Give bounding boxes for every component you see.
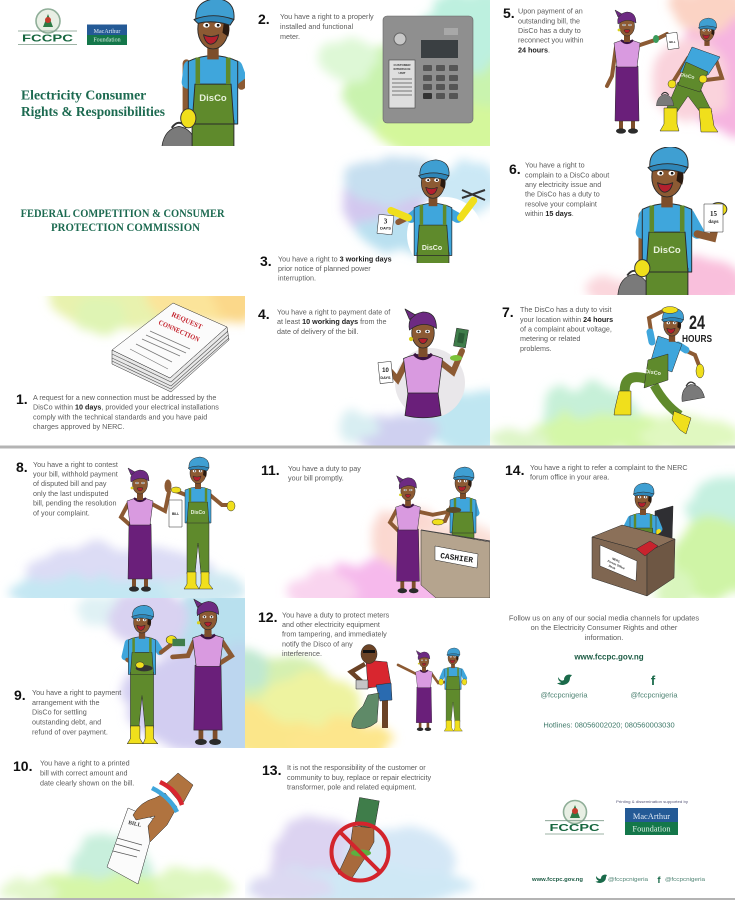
text: 3 working days: [340, 254, 392, 264]
number: 1.: [16, 391, 28, 407]
illustration: DisCo worker: DisCo: [199, 93, 227, 104]
label: 24 hours: [682, 313, 712, 345]
notice: 15 days: 15: [710, 210, 718, 218]
text: community to buy, replace or repair electricity: [287, 773, 431, 782]
watercolor background: [0, 834, 230, 900]
text: DisCo within: [33, 402, 75, 412]
text: arrangement with the: [32, 698, 100, 707]
follow us text: Follow us on any of our social media channels for updates: [509, 614, 699, 622]
number: 11.: [261, 462, 280, 478]
number: 3.: [260, 253, 272, 269]
illustration: running worker: [614, 307, 705, 434]
text: You have a right to a properly: [280, 12, 374, 21]
number: 8.: [16, 459, 28, 475]
panel 9: payment arrangement: [14, 598, 245, 748]
text: and other electricity equipment: [282, 620, 380, 629]
text: interference.: [282, 649, 322, 658]
text: You have a right to payment: [32, 688, 121, 697]
text: comply with the technical standards and you have paid: [33, 412, 207, 422]
text: DisCo for settling: [32, 708, 87, 716]
watercolor background: [314, 0, 490, 146]
panel 12: protect meters: [245, 612, 468, 748]
panel 2: meter: [258, 0, 490, 146]
footer links: @fccpcnigeria: [608, 877, 648, 883]
notice: 3 days: [377, 214, 394, 235]
text: of disputed bill and pay: [33, 479, 107, 488]
watercolor background: [338, 152, 490, 260]
MacArthur Foundation logo: MacArthur: [94, 29, 120, 35]
twitter handle: @fccpcnigeria: [541, 690, 588, 700]
text: 10 days, provided your electrical installations: [75, 402, 219, 412]
title: Rights & Responsibilities: [21, 105, 166, 120]
illustration: hand holding bill: BILL: [128, 820, 142, 829]
watercolor background: [336, 348, 490, 446]
text: date of delivery of the bill.: [277, 327, 359, 336]
icon: twitter: [557, 674, 572, 685]
supported by note: Printing & dissemination supported by: [616, 800, 688, 804]
illustration: woman and worker with bill: BILL: [172, 512, 179, 516]
watercolor background: [245, 818, 475, 900]
number: 10.: [13, 758, 32, 774]
illustration: woman pointing: [398, 651, 446, 731]
MacArthur Foundation logo: [87, 24, 127, 45]
text: outstanding debt, and: [32, 718, 101, 726]
panel 4: payment date: [258, 308, 490, 446]
organisation name: PROTECTION COMMISSION: [51, 222, 201, 234]
text: from tampering, and immediately: [282, 630, 387, 638]
notice: 3 days: 3: [384, 218, 388, 226]
panel 5: reconnection: [503, 0, 735, 136]
panel 7: site visit within 24 hours: [490, 304, 735, 457]
illustration: worker with 15 days notice: [618, 147, 728, 295]
text: only the last undisputed: [33, 489, 109, 498]
MacArthur Foundation logo: [625, 808, 678, 835]
text: Upon payment of an: [518, 6, 583, 16]
cover panel: [18, 0, 249, 249]
text: You have a right to a printed: [40, 758, 130, 768]
text: 15 days.: [545, 209, 574, 218]
cashier counter: CASHIER: [440, 552, 474, 566]
number: 7.: [502, 304, 514, 320]
MacArthur Foundation logo: MacArthur: [633, 812, 670, 821]
illustration: worker handing cash: [125, 605, 185, 744]
panel 14: NERC forum: [506, 464, 735, 598]
watercolor background: [75, 598, 245, 748]
follow us text: on the Electricity Consumer Rights and other: [531, 623, 678, 632]
text: You have a duty to pay: [288, 464, 361, 473]
panel 8: contest bill: [10, 457, 245, 615]
FCCPC logo: [545, 800, 604, 834]
illustration: woman paying: [390, 476, 461, 593]
illustration: prepaid meter: UNIT: [398, 71, 406, 75]
watercolor background: [284, 505, 490, 598]
text: bill with correct amount and: [40, 768, 128, 778]
label: 24 hours: HOURS: [682, 334, 712, 345]
number: 2.: [258, 11, 270, 27]
illustration: woman hands bill to worker: [607, 10, 722, 134]
panel 10: printed bill: [0, 758, 230, 900]
notice: 15 days: days: [708, 219, 719, 224]
illustration: worker at desk: NERC: [611, 557, 621, 564]
notice: 3 days: DAYS: [380, 226, 391, 230]
hotlines: Hotlines: 08056002020; 080560003030: [543, 720, 675, 730]
FCCPC logo: FCCPC: [22, 32, 74, 44]
text: 24 hours: [583, 315, 613, 324]
text: your location within: [520, 315, 583, 324]
text: forum office in your area.: [530, 472, 609, 482]
facebook handle: @fccpcnigeria: [631, 690, 678, 700]
text: resolve your complaint: [525, 200, 597, 208]
text: reconnect you within: [518, 36, 584, 45]
text: You have a right to refer a complaint to the NERC: [530, 463, 688, 472]
text: metering or related: [520, 334, 580, 343]
text: any electricity issue and: [525, 180, 601, 189]
illustration: worker with notice and pliers: [387, 160, 478, 263]
panel 1: new connection: [16, 296, 245, 430]
text: interruption.: [278, 274, 316, 282]
text: You have a duty to protect meters: [282, 610, 390, 620]
text: complain to a DisCo about: [525, 170, 609, 180]
number: 9.: [14, 687, 26, 703]
illustration: woman holding notice and cash: 10: [382, 368, 389, 374]
title: Electricity Consumer: [21, 88, 146, 104]
text: prior notice of planned power: [278, 264, 371, 273]
icon: facebook: f: [651, 673, 656, 688]
illustration: worker with notice and pliers: DisCo: [422, 245, 442, 252]
website: www.fccpc.gov.ng: [573, 652, 644, 662]
text: You have a right to: [525, 160, 585, 170]
text: your bill promptly.: [288, 474, 344, 482]
illustration: woman and worker with bill: [121, 457, 235, 592]
text: transformer, pole and related equipment.: [287, 782, 416, 792]
contact panel: [509, 614, 705, 886]
illustration: woman holding notice and cash: [378, 309, 468, 418]
illustration: woman holding notice and cash: DAYS: [380, 376, 391, 380]
illustration: request connection papers: REQUEST: [170, 311, 204, 331]
text: outstanding bill, the: [518, 16, 580, 25]
number: 5.: [503, 5, 515, 21]
illustration: worker at desk: Forum Office: [607, 559, 626, 571]
MacArthur Foundation logo: Foundation: [632, 824, 671, 834]
illustration: DisCo worker: [162, 0, 245, 146]
text: of your complaint.: [33, 508, 90, 517]
illustration: worker with 15 days notice: DisCo: [653, 245, 681, 256]
text: at least: [277, 317, 302, 326]
illustration: prepaid meter: INTERFACE: [393, 67, 411, 71]
illustration: worker behind counter: [432, 466, 480, 540]
text: of a complaint about voltage,: [520, 324, 612, 334]
illustration: running worker: DisCo: [645, 369, 662, 377]
text: bill, pending the resolution: [33, 498, 117, 508]
footer links: @fccpcnigeria: [665, 877, 705, 883]
divider between sheets: [0, 446, 735, 448]
icon: pliers: [462, 190, 485, 200]
footer links: [531, 874, 705, 886]
illustration: prepaid meter: CUSTOMER: [393, 63, 411, 67]
text: DisCo has a duty to: [518, 26, 581, 35]
text: the DisCo has a duty to: [525, 190, 600, 198]
icon: no paying sign: [332, 797, 388, 880]
watercolor background: [490, 385, 735, 457]
illustration: worker: [439, 648, 467, 731]
panel 3: planned interruption notice: [260, 152, 490, 282]
text: meter.: [280, 32, 300, 41]
illustration: woman hands bill to worker: BILL: [669, 40, 676, 44]
text: refund of over payment.: [32, 728, 108, 736]
watercolor background: [245, 644, 400, 748]
text: .: [548, 46, 550, 54]
panel 13: not the customer's responsibility: [245, 762, 475, 900]
text: installed and functional: [280, 22, 354, 31]
text: your bill, withhold payment: [33, 470, 118, 478]
illustration: worker at desk: Desk: [608, 564, 616, 571]
text: notify the Disco of any: [282, 640, 353, 648]
number: 13.: [262, 762, 281, 778]
text: You have a right to payment date of: [277, 308, 390, 316]
MacArthur Foundation logo: Foundation: [93, 38, 121, 44]
text: date clearly shown on the bill.: [40, 778, 134, 788]
watercolor background: [5, 537, 245, 598]
watercolor background: [655, 475, 735, 610]
text: A request for a new connection must be addressed by the: [33, 393, 216, 402]
text: It is not the responsibility of the customer or: [287, 763, 426, 772]
notice: 15 days: [704, 204, 723, 232]
illustration: request connection papers: CONNECTION: [157, 319, 201, 344]
FCCPC logo: [18, 9, 77, 44]
bottom rule: [0, 898, 735, 900]
watercolor background: [44, 296, 245, 340]
grey circle behind woman: [395, 348, 465, 418]
illustration: woman and worker with bill: DisCo: [191, 510, 205, 516]
follow us text: information.: [585, 633, 623, 642]
footer links: www.fccpc.gov.ng: [531, 877, 584, 883]
number: 6.: [509, 161, 521, 177]
illustration: prepaid meter: [383, 16, 473, 123]
text: within: [524, 209, 545, 218]
FCCPC logo: FCCPC: [550, 822, 600, 834]
text: You have a right to contest: [33, 460, 118, 469]
number: 12.: [258, 609, 277, 625]
illustration: woman receiving cash: [173, 599, 232, 745]
panel 11: duty to pay: [262, 466, 490, 598]
illustration: woman hands bill to worker: DisCo: [680, 72, 695, 81]
cashier counter: [421, 530, 490, 598]
illustration: request connection papers: [112, 303, 229, 392]
footer links: f: [657, 875, 661, 886]
organisation name: FEDERAL COMPETITION & CONSUMER: [21, 208, 225, 220]
text: 24 hours: [518, 46, 548, 54]
illustration: worker at desk: [592, 482, 676, 596]
text: charges approved by NERC.: [33, 422, 124, 431]
illustration: hand holding bill: [107, 773, 193, 884]
panel 6: complaint resolution: [510, 147, 735, 295]
label: 24 hours: 24: [689, 313, 705, 334]
watercolor background: [583, 250, 735, 295]
watercolor background: [652, 0, 735, 136]
text: The DisCo has a duty to visit: [520, 305, 611, 314]
number: 4.: [258, 306, 270, 322]
illustration: thief with bag: [351, 644, 392, 729]
text: problems.: [520, 344, 552, 353]
text: 10 working days from the: [302, 317, 386, 326]
text: You have a right to: [278, 254, 340, 264]
number: 14.: [505, 462, 524, 478]
